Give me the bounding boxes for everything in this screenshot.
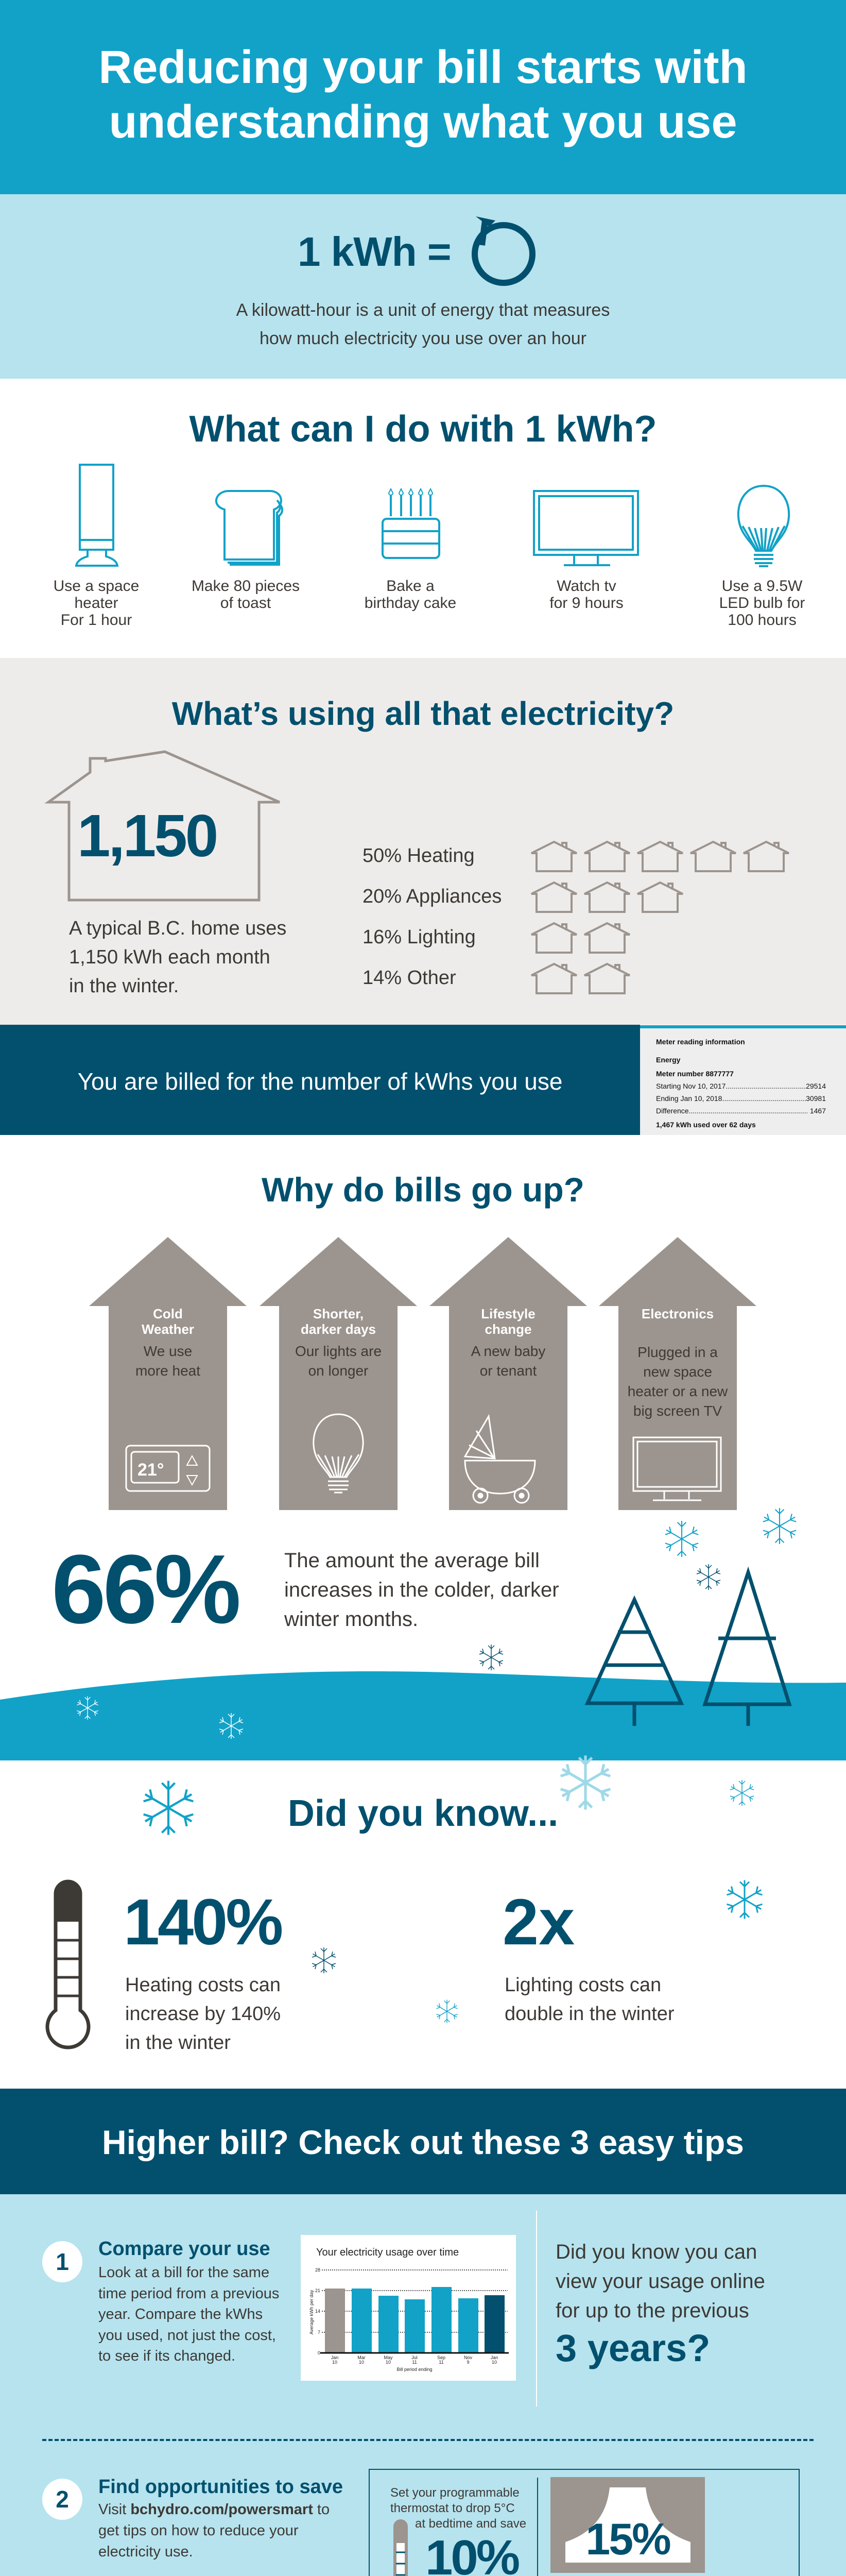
panel: meter reading: Starting Nov 10, 2017 xyxy=(656,1082,726,1090)
labels: uses: 100 hours xyxy=(728,612,797,629)
legend: usage breakdown xyxy=(362,841,789,994)
chart: usage over time: 10 xyxy=(359,2360,364,2365)
panel: meter reading: 1467 xyxy=(810,1107,826,1115)
icon: thermometer small xyxy=(393,2519,408,2576)
text: 66% explanation: The amount the average bill xyxy=(284,1549,540,1572)
text: 66% explanation: increases in the colder, darker xyxy=(284,1579,559,1601)
chart: usage over time: 21 xyxy=(315,2288,320,2293)
panel: meter reading: 29514 xyxy=(806,1082,826,1090)
arrow: lifestyle change: change xyxy=(485,1321,532,1337)
chart: usage over time: Jul xyxy=(411,2355,418,2360)
tip 1: compare your use xyxy=(42,2238,279,2364)
icon: number 1 xyxy=(42,2241,82,2282)
title xyxy=(98,42,748,148)
arrow: electronics: big screen TV xyxy=(633,1403,722,1419)
callout box: thermostat and drapes xyxy=(369,2469,800,2576)
dashed divider xyxy=(42,2439,814,2441)
labels: uses: Use a 9.5W xyxy=(722,578,802,595)
stat: 66%: 66% xyxy=(51,1535,238,1644)
text: you used, not just the cost, xyxy=(98,2327,276,2343)
chart: usage over time: 10 xyxy=(492,2360,497,2365)
chart: usage over time: 14 xyxy=(315,2309,320,2314)
arrow: cold weather: Weather xyxy=(142,1321,194,1337)
chart: usage over time: 9 xyxy=(467,2360,470,2365)
legend: usage breakdown: 20% Appliances xyxy=(362,886,502,907)
heading: What can I do with 1 kWh? xyxy=(189,409,657,450)
panel: meter reading: 30981 xyxy=(806,1094,826,1103)
icon: number 2: 2 xyxy=(56,2486,69,2513)
wave: snowy ground xyxy=(0,1671,846,1760)
tip 2: find opportunities xyxy=(42,2476,343,2560)
icon: thermostat xyxy=(126,1445,210,1492)
icon: cake xyxy=(382,487,440,559)
icon: tv xyxy=(533,490,639,566)
text: get tips on how to reduce your xyxy=(98,2522,299,2539)
banner: billed for kWhs: You are billed for the number of kWhs you use xyxy=(78,1068,562,1095)
labels: uses: Make 80 pieces xyxy=(192,578,300,595)
panel: meter reading: Difference xyxy=(656,1107,689,1115)
icon: stroller xyxy=(463,1414,536,1503)
icon: thermostat: 21° xyxy=(137,1460,164,1480)
text: heating costs: in the winter xyxy=(125,2032,231,2054)
labels: uses xyxy=(54,578,805,629)
chart: usage over time: Bill period ending xyxy=(396,2367,433,2372)
labels: uses: For 1 hour xyxy=(61,612,132,629)
arrow: lifestyle change: A new baby xyxy=(471,1343,545,1359)
text: thermostat: at bedtime and save xyxy=(415,2517,526,2531)
icon: trees xyxy=(585,1566,792,1726)
chart: usage over time: May xyxy=(384,2355,393,2360)
chart: usage over time: Your electricity usage over time xyxy=(316,2247,459,2258)
icon: toast xyxy=(215,490,283,566)
text: typical home: A typical B.C. home uses xyxy=(69,918,286,939)
title: understanding what you use xyxy=(109,96,737,148)
labels: uses: Bake a xyxy=(386,578,435,595)
panel: kwh definition xyxy=(0,194,846,379)
text: year. Compare the kWhs xyxy=(98,2306,263,2323)
arrow: electronics: Electronics xyxy=(642,1306,714,1321)
icon: thermometer xyxy=(45,1879,91,2049)
icon: big house with 1,150 xyxy=(44,750,280,902)
icon: tv xyxy=(632,1436,722,1501)
icon: space heater xyxy=(75,464,118,567)
chart: usage over time xyxy=(301,2235,516,2381)
heading: why do bills go up: Why do bills go up? xyxy=(262,1171,584,1209)
chart: usage over time: Jan xyxy=(331,2355,338,2360)
labels: uses: Watch tv xyxy=(557,578,616,595)
callout: 3 years xyxy=(556,2241,765,2369)
legend: usage breakdown: 16% Lighting xyxy=(362,926,476,948)
arrow: lifestyle change: or tenant xyxy=(480,1363,537,1379)
heading: did you know: Did you know... xyxy=(288,1793,558,1834)
labels: uses: LED bulb for xyxy=(719,595,805,612)
arrow: electronics: heater or a new xyxy=(628,1383,728,1399)
text: Visit bchydro.com/powersmart to xyxy=(98,2501,330,2518)
arrow: shorter darker days: Our lights are xyxy=(295,1343,382,1359)
header band xyxy=(0,0,846,194)
stat: 140%: 140% xyxy=(124,1886,281,1958)
arrow: shorter darker days xyxy=(260,1237,417,1510)
arrow: cold weather: more heat xyxy=(135,1363,200,1379)
text: electricity use. xyxy=(98,2544,193,2560)
stat: 1,150: 1,150 xyxy=(77,802,216,869)
text xyxy=(98,2501,330,2560)
icon row: houses xyxy=(531,841,789,994)
panel: meter reading: Meter number 8877777 xyxy=(656,1070,734,1078)
arrow: lifestyle change: Lifestyle xyxy=(481,1306,536,1321)
text: thermostat xyxy=(390,2486,526,2531)
text: time period from a previous xyxy=(98,2285,279,2302)
arrow: electronics: new space xyxy=(643,1364,712,1380)
labels: uses: heater xyxy=(74,595,118,612)
icon: clock xyxy=(472,216,536,286)
text: heating costs: increase by 140% xyxy=(125,2003,281,2025)
chart: usage over time: 7 xyxy=(318,2330,320,2335)
text: heating costs xyxy=(125,1974,281,2054)
labels: uses: of toast xyxy=(220,595,271,612)
text: definition: how much electricity you use over an hour xyxy=(260,329,586,348)
callout: 3 years: Did you know you can xyxy=(556,2241,757,2263)
chart: usage over time: 11 xyxy=(439,2360,444,2365)
chart: usage over time: Average kWh per day xyxy=(309,2290,314,2334)
text: 66% explanation xyxy=(284,1549,559,1631)
arrow: cold weather: Cold xyxy=(153,1306,183,1321)
text: typical home: in the winter. xyxy=(69,975,179,997)
banner: 3 easy tips xyxy=(0,2089,846,2194)
icon: LED bulb xyxy=(737,485,790,567)
arrow: cold weather xyxy=(89,1237,247,1510)
panel: meter reading: 1,467 kWh used over 62 days xyxy=(656,1121,756,1129)
chart: usage over time: Jan xyxy=(491,2355,498,2360)
text: thermostat: Set your programmable xyxy=(390,2486,520,2500)
chart: usage over time: 28 xyxy=(315,2267,320,2273)
icon: drapes with 15%: 15% xyxy=(585,2515,670,2564)
banner: billed for kWhs xyxy=(0,1025,640,1135)
arrow: electronics xyxy=(599,1237,756,1510)
labels: uses: Use a space xyxy=(54,578,139,595)
icon: drapes with 15% xyxy=(550,2477,705,2573)
arrow: shorter darker days: darker days xyxy=(301,1321,376,1337)
chart: usage over time: 0 xyxy=(318,2350,320,2355)
icon: number 2 xyxy=(42,2479,82,2520)
chart: usage over time: Mar xyxy=(357,2355,366,2360)
arrow: cold weather: We use xyxy=(144,1343,192,1359)
chart: usage over time: 11 xyxy=(412,2360,417,2365)
panel: meter reading xyxy=(640,1025,846,1135)
labels: uses: for 9 hours xyxy=(549,595,624,612)
icon: snowflakes (did you know) xyxy=(143,1756,763,2023)
legend: usage breakdown: 50% Heating xyxy=(362,845,475,867)
panel: meter reading: Meter reading information xyxy=(656,1038,745,1046)
panel: tips xyxy=(0,2194,846,2576)
title: Reducing your bill starts with xyxy=(98,42,748,93)
arrow: shorter darker days: Shorter, xyxy=(313,1306,364,1321)
stat: 2x: 2x xyxy=(503,1886,575,1958)
divider line xyxy=(536,2211,537,2406)
text: lighting costs: Lighting costs can xyxy=(505,1974,661,1996)
text: lighting costs: double in the winter xyxy=(505,2003,675,2025)
panel: meter reading: Energy xyxy=(656,1056,680,1064)
text: definition xyxy=(236,300,610,348)
legend: usage breakdown: 14% Other xyxy=(362,967,456,989)
heading: What’s using all that electricity? xyxy=(172,695,674,732)
panel: what's using electricity xyxy=(0,658,846,1025)
text: Look at a bill for the same xyxy=(98,2264,269,2281)
text: definition: A kilowatt-hour is a unit of energy that measures xyxy=(236,300,610,320)
arrow: electronics: Plugged in a xyxy=(637,1344,718,1360)
banner: 3 easy tips: Higher bill? Check out these 3 easy tips xyxy=(102,2123,744,2161)
labels: uses: birthday cake xyxy=(365,595,456,612)
text xyxy=(98,2264,279,2364)
callout: 3 years: view your usage online xyxy=(556,2270,765,2293)
panel: what can I do xyxy=(0,379,846,658)
chart: usage over time: 10 xyxy=(332,2360,337,2365)
icon: snowflakes (why section) xyxy=(77,1508,796,1739)
heading: Compare your use xyxy=(98,2238,270,2260)
callout: 3 years: for up to the previous xyxy=(556,2299,749,2322)
text: to see if its changed. xyxy=(98,2348,235,2364)
text: heating costs: Heating costs can xyxy=(125,1974,281,1996)
chart: usage over time: Nov xyxy=(464,2355,472,2360)
icon: number 1: 1 xyxy=(56,2248,69,2275)
arrow: lifestyle change xyxy=(429,1237,587,1510)
arrow: shorter darker days: on longer xyxy=(308,1363,368,1379)
heading: Find opportunities to save xyxy=(98,2476,343,2498)
text: lighting costs xyxy=(505,1974,675,2025)
divider xyxy=(537,2478,538,2576)
panel: meter reading: Ending Jan 10, 2018 xyxy=(656,1094,722,1103)
chart: usage over time: Sep xyxy=(437,2355,445,2360)
heading: 1 kWh =: 1 kWh = xyxy=(298,229,451,275)
text: typical home: 1,150 kWh each month xyxy=(69,946,270,968)
icon: bulb xyxy=(313,1414,364,1493)
callout: 3 years: 3 years? xyxy=(556,2327,710,2369)
chart: usage over time: 10 xyxy=(386,2360,391,2365)
text: typical home xyxy=(69,918,286,997)
text: thermostat: thermostat to drop 5°C xyxy=(390,2501,515,2515)
text: 66% explanation: winter months. xyxy=(284,1608,418,1631)
